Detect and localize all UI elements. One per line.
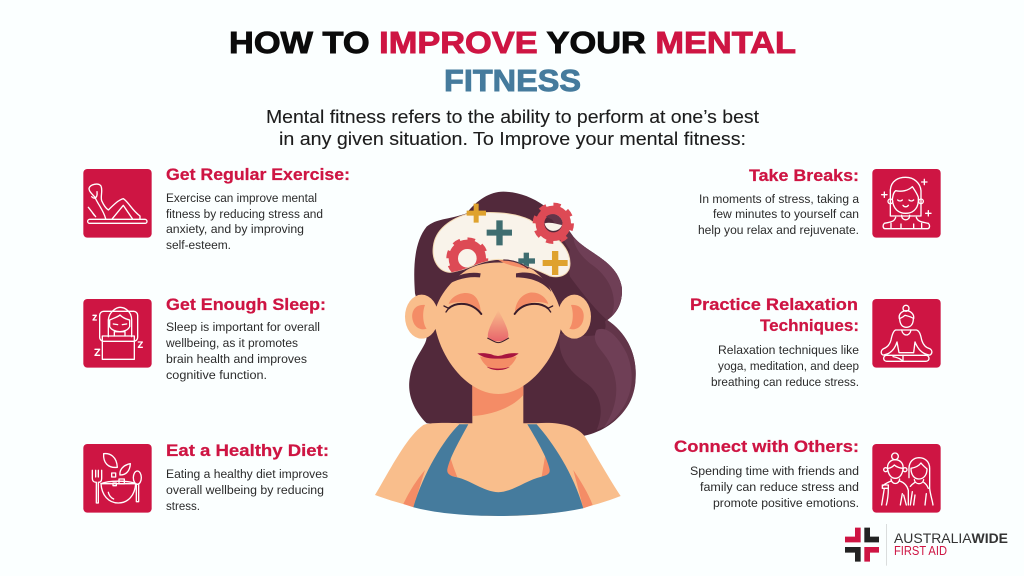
intro text: [266, 106, 759, 149]
body text: cognitive function.: [166, 368, 267, 382]
body text: breathing can reduce stress.: [711, 375, 859, 389]
body text: [698, 192, 859, 237]
body text: family can reduce stress and: [700, 480, 859, 494]
body text: Spending time with friends and: [690, 464, 859, 478]
body text: [711, 343, 859, 389]
icon: take breaks: [872, 169, 941, 238]
plus signs: [467, 204, 568, 275]
body text: [166, 191, 323, 252]
gears: [449, 240, 535, 277]
body text: promote positive emotions.: [713, 496, 859, 510]
heading: Eat a Healthy Diet:: [166, 441, 329, 460]
panel: take breaks: [698, 166, 941, 238]
title: FITNESS: [444, 63, 581, 98]
heading: Take Breaks:: [749, 166, 859, 185]
icon: two friends: [872, 444, 941, 513]
body text: [165, 320, 320, 382]
heading: Get Enough Sleep:: [166, 295, 326, 314]
neck and shoulders: [375, 380, 621, 516]
logo mark: [845, 524, 887, 566]
panel: connect with others: [674, 437, 941, 513]
title: HOW TO IMPROVE YOUR MENTAL: [229, 25, 796, 60]
body text: yoga, meditation, and deep: [718, 359, 859, 373]
icon: meditation: [872, 299, 941, 368]
body text: stress.: [166, 499, 200, 513]
body text: brain health and improves: [166, 352, 307, 366]
body text: [166, 467, 328, 513]
intro text: Mental fitness refers to the ability to perform at one’s best: [266, 106, 759, 127]
intro text: in any given situation. To Improve your mental fitness:: [279, 128, 746, 149]
icon: exercise: [83, 169, 152, 238]
heading: Practice Relaxation: [690, 295, 858, 314]
illustration: woman with sleep mask: [375, 192, 636, 516]
panel: practice relaxation techniques: [690, 295, 941, 389]
heading: Connect with Others:: [674, 437, 859, 456]
title: [229, 25, 796, 98]
panel: eat a healthy diet: [83, 441, 329, 513]
hair: [409, 192, 636, 436]
body text: few minutes to yourself can: [713, 207, 859, 221]
icon: healthy diet: [83, 444, 152, 513]
body text: anxiety, and by improving: [166, 222, 304, 236]
body text: In moments of stress, taking a: [699, 192, 859, 206]
body text: Eating a healthy diet improves: [166, 467, 328, 481]
heading: [690, 295, 859, 335]
ears: [405, 295, 591, 339]
logo text: AUSTRALIAWIDE: [894, 531, 1008, 546]
body text: overall wellbeing by reducing: [166, 483, 324, 497]
logo: Australia Wide First Aid: [845, 524, 1008, 566]
body text: wellbeing, as it promotes: [165, 336, 298, 350]
tank top: [413, 424, 583, 516]
eyebrows: [442, 272, 551, 292]
body text: help you relax and rejuvenate.: [698, 223, 859, 237]
logo: Australia Wide First Aid: FIRST AID: [894, 544, 947, 558]
body text: Exercise can improve mental: [166, 191, 317, 205]
sleep mask: [433, 204, 571, 277]
panel: get enough sleep: [83, 295, 326, 382]
eyes: [444, 304, 553, 314]
body text: Sleep is important for overall: [166, 320, 320, 334]
body text: self-esteem.: [166, 238, 231, 252]
face: [434, 262, 562, 394]
eye shadow: [449, 293, 548, 312]
panel: get regular exercise: [83, 165, 350, 252]
nose: [488, 310, 508, 341]
body text: fitness by reducing stress and: [166, 207, 323, 221]
heading: Techniques:: [760, 316, 859, 335]
icon: sleep: [83, 299, 152, 368]
lips: [477, 353, 519, 370]
heading: Get Regular Exercise:: [166, 165, 350, 184]
body text: [690, 464, 859, 510]
body text: Relaxation techniques like: [718, 343, 859, 357]
